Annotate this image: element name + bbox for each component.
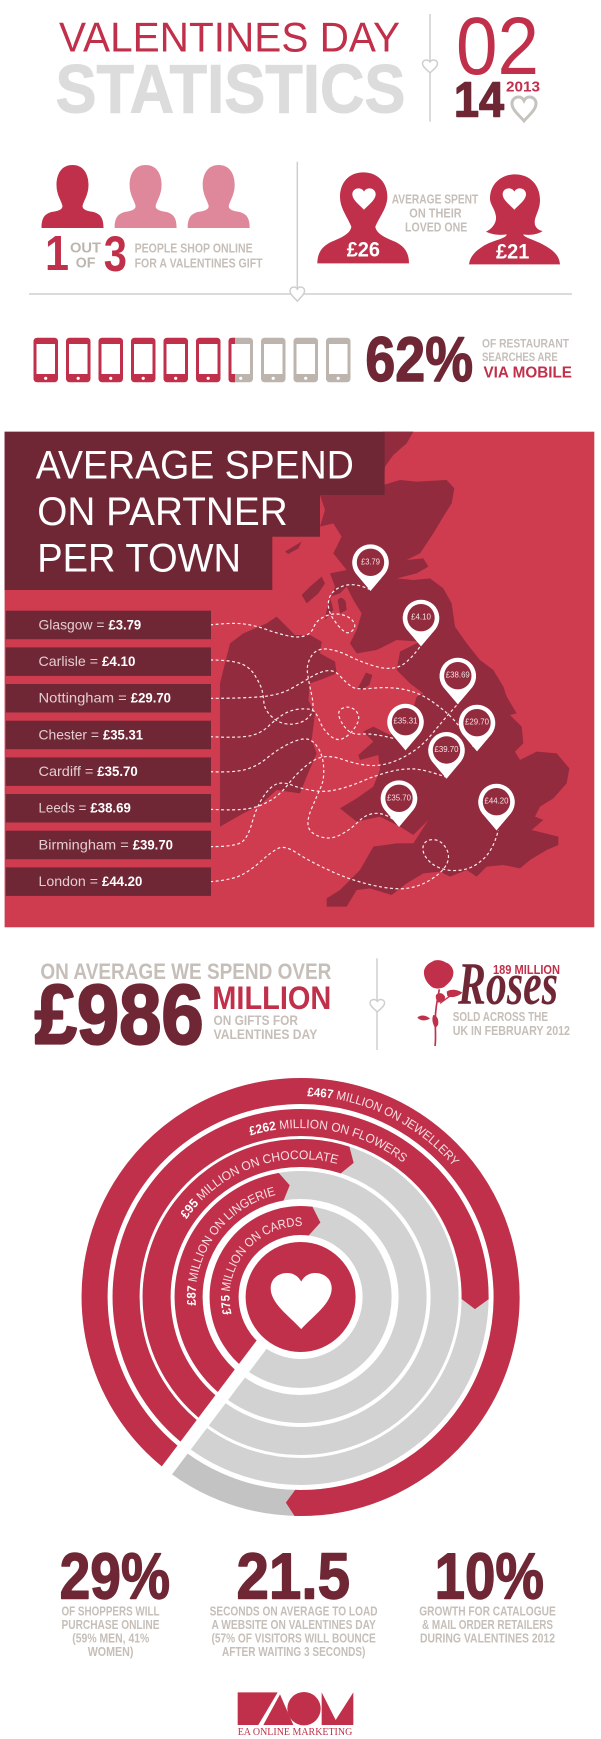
town row: London: London =	[38, 873, 98, 889]
caption: average spent: LOVED ONE	[405, 221, 467, 235]
map pin: £39.70	[428, 732, 465, 779]
stat: 21.5	[210, 1539, 378, 1659]
label: flowers: £262 MILLION ON FLOWERS	[249, 1119, 407, 1162]
panel: roses	[417, 951, 570, 1046]
icon row: phones	[34, 338, 350, 382]
title block: ON PARTNER	[37, 490, 288, 534]
map pin: £29.70	[459, 705, 495, 751]
map pin: £35.70	[381, 780, 417, 827]
month: 02	[456, 1, 539, 92]
town row: Carlisle: Carlisle =	[38, 653, 98, 669]
centre disc	[246, 1242, 356, 1352]
town row: Nottingham	[6, 684, 211, 712]
stat: million: MILLION	[212, 980, 331, 1016]
stat: 1 out of 3: 3	[104, 226, 127, 282]
radial chart: gift spending	[82, 1078, 520, 1516]
icon: person highlighted	[42, 165, 104, 228]
stat: 1 out of 3	[45, 226, 127, 282]
ring: lingerie	[144, 1140, 457, 1454]
divider with heart	[370, 958, 385, 1050]
woman amount: £21	[496, 240, 530, 263]
caption: restaurant searches	[482, 336, 572, 381]
map pin: £39.70: £39.70	[434, 744, 459, 754]
stat: 10%: 10%	[435, 1539, 544, 1612]
town row: Nottingham: £29.70	[131, 690, 171, 706]
label: cards: £75 MILLION ON CARDS	[220, 1217, 302, 1315]
ring: flowers	[56, 1053, 545, 1541]
town row: Cardiff	[6, 757, 211, 786]
label: lingerie: £87 MILLION ON LINGERIE	[186, 1186, 276, 1306]
map pin: £35.31: £35.31	[394, 716, 418, 726]
icon: man	[317, 172, 409, 263]
town row: London: £44.20	[102, 873, 142, 889]
heading: 189 million: 189 MILLION	[493, 962, 560, 977]
dashed route lines	[210, 585, 498, 889]
map pin: £35.31	[387, 704, 424, 750]
town row: Chester: Chester =	[38, 726, 99, 742]
ring: cards	[193, 1190, 408, 1404]
stat: 10%: DURING VALENTINES 2012	[420, 1632, 555, 1646]
logo wordmark: EA ONLINE MARKETING	[238, 1727, 353, 1738]
stat: 29%: PURCHASE ONLINE	[62, 1618, 160, 1632]
divider with heart	[29, 162, 572, 301]
map pin: £38.69: £38.69	[446, 670, 470, 680]
heading: roses: Roses	[457, 951, 558, 1017]
town row: Carlisle: £4.10	[102, 653, 136, 669]
day: 14	[454, 74, 504, 128]
caption: sold across	[453, 1010, 570, 1038]
caption: restaurant searches: SEARCHES ARE	[482, 350, 558, 364]
caption: restaurant searches: OF RESTAURANT	[482, 336, 570, 350]
heading: on average: ON AVERAGE WE SPEND OVER	[40, 959, 331, 984]
caption: restaurant searches: VIA MOBILE	[484, 364, 572, 381]
caption: people shop online	[135, 242, 263, 270]
stat: £986: £986	[35, 967, 204, 1061]
caption: people shop online: FOR A VALENTINES GIFT	[135, 256, 263, 270]
town row: Leeds: Leeds =	[38, 800, 86, 816]
map pin: £44.20: £44.20	[484, 796, 509, 806]
gap slit	[148, 1334, 270, 1496]
title block: AVERAGE SPEND	[36, 443, 354, 487]
stat: 21.5: A WEBSITE ON VALENTINES DAY	[212, 1618, 376, 1632]
label: chocolate: £95 MILLION ON CHOCOLATE	[181, 1150, 338, 1220]
map pin: £3.79: £3.79	[361, 556, 380, 566]
stat: 21.5: 21.5	[236, 1539, 350, 1612]
heading: statistics: STATISTICS	[56, 51, 406, 128]
caption: average spent: ON THEIR	[409, 207, 462, 221]
panel: average spend per town	[5, 432, 594, 927]
stat: 10%: & MAIL ORDER RETAILERS	[422, 1618, 553, 1632]
title block	[5, 432, 385, 590]
town row: Carlisle	[6, 647, 211, 676]
town row: Cardiff: £35.70	[97, 763, 138, 779]
stat: 1 out of 3: OUT	[70, 240, 101, 256]
caption: on gifts	[214, 1012, 318, 1042]
town row: Chester	[6, 721, 211, 749]
stat: 29%: (59% MEN, 41%	[72, 1632, 149, 1646]
caption: on gifts: VALENTINES DAY	[214, 1026, 318, 1042]
icon: person	[188, 165, 250, 228]
town row: Birmingham	[6, 831, 211, 859]
caption: on gifts: ON GIFTS FOR	[214, 1012, 298, 1028]
town row: Chester: £35.31	[103, 726, 143, 742]
town row: Glasgow: £3.79	[108, 616, 141, 632]
caption: average spent: AVERAGE SPENT	[392, 192, 479, 206]
stat: 21.5: (57% OF VISITORS WILL BOUNCE	[212, 1632, 376, 1646]
map pin: £35.70: £35.70	[387, 792, 411, 802]
uk map	[220, 432, 569, 907]
logo mark	[238, 1692, 353, 1725]
stat: 62%: 62%	[365, 325, 473, 395]
stat: 29%: WOMEN)	[88, 1645, 134, 1659]
label: jewellery: £467 MILLION ON JEWELLERY	[307, 1088, 460, 1164]
stat: 29%: 29%	[60, 1539, 170, 1612]
town row: Nottingham: Nottingham =	[38, 690, 127, 706]
logo	[238, 1692, 353, 1738]
date divider	[422, 14, 438, 122]
ireland	[220, 617, 337, 827]
map pin: £29.70: £29.70	[465, 717, 489, 727]
grey ring tracks	[95, 1091, 507, 1503]
stat: 29%: OF SHOPPERS WILL	[62, 1605, 160, 1619]
great britain	[320, 432, 569, 907]
panel: mobile searches	[34, 325, 572, 395]
caption: average spent	[392, 192, 479, 235]
heading: valentines day: VALENTINES DAY	[59, 14, 400, 61]
stat: 1 out of 3: OF	[76, 255, 96, 271]
stat: 10%: GROWTH FOR CATALOGUE	[419, 1605, 556, 1619]
icon: woman	[469, 174, 560, 264]
map pin: £38.69	[440, 658, 476, 704]
town row: Glasgow: Glasgow =	[38, 616, 104, 632]
town row: Leeds	[6, 794, 211, 822]
map pin: £4.10: £4.10	[411, 612, 431, 622]
stat: 1 out of 3: 1	[45, 227, 69, 281]
panel: one out of three	[42, 165, 263, 282]
panel: total spend	[35, 959, 331, 1061]
year: 2013	[506, 80, 540, 96]
stat: 21.5: SECONDS ON AVERAGE TO LOAD	[210, 1605, 378, 1619]
caption: sold across: SOLD ACROSS THE	[453, 1010, 548, 1024]
title block: PER TOWN	[37, 537, 241, 581]
caption: sold across: UK IN FEBRUARY 2012	[453, 1024, 570, 1038]
town row: Birmingham: Birmingham =	[38, 836, 129, 852]
map pin: £3.79	[352, 544, 389, 591]
ring: chocolate	[99, 1095, 502, 1499]
town row: Birmingham: £39.70	[133, 836, 173, 852]
map pin: £4.10	[403, 600, 439, 646]
stat: 21.5: AFTER WAITING 3 SECONDS)	[222, 1645, 365, 1659]
stat: 29%	[60, 1539, 170, 1659]
icon: person	[115, 165, 177, 228]
ring: jewellery	[12, 1009, 589, 1585]
town row: Glasgow	[6, 611, 211, 639]
town row: London	[6, 867, 211, 896]
town row: Cardiff: Cardiff =	[38, 763, 93, 779]
panel background	[5, 432, 594, 927]
date	[454, 1, 540, 128]
stat: 10%	[419, 1539, 556, 1646]
panel: average spent on loved one	[317, 172, 560, 264]
icon: rose	[417, 960, 462, 1046]
map pin: £44.20	[478, 784, 515, 830]
caption: people shop online: PEOPLE SHOP ONLINE	[135, 242, 253, 256]
title	[56, 14, 406, 128]
town row: Leeds: £38.69	[90, 800, 131, 816]
man amount: £26	[347, 239, 380, 262]
islands	[285, 542, 372, 690]
icon: heart outline	[512, 97, 536, 121]
